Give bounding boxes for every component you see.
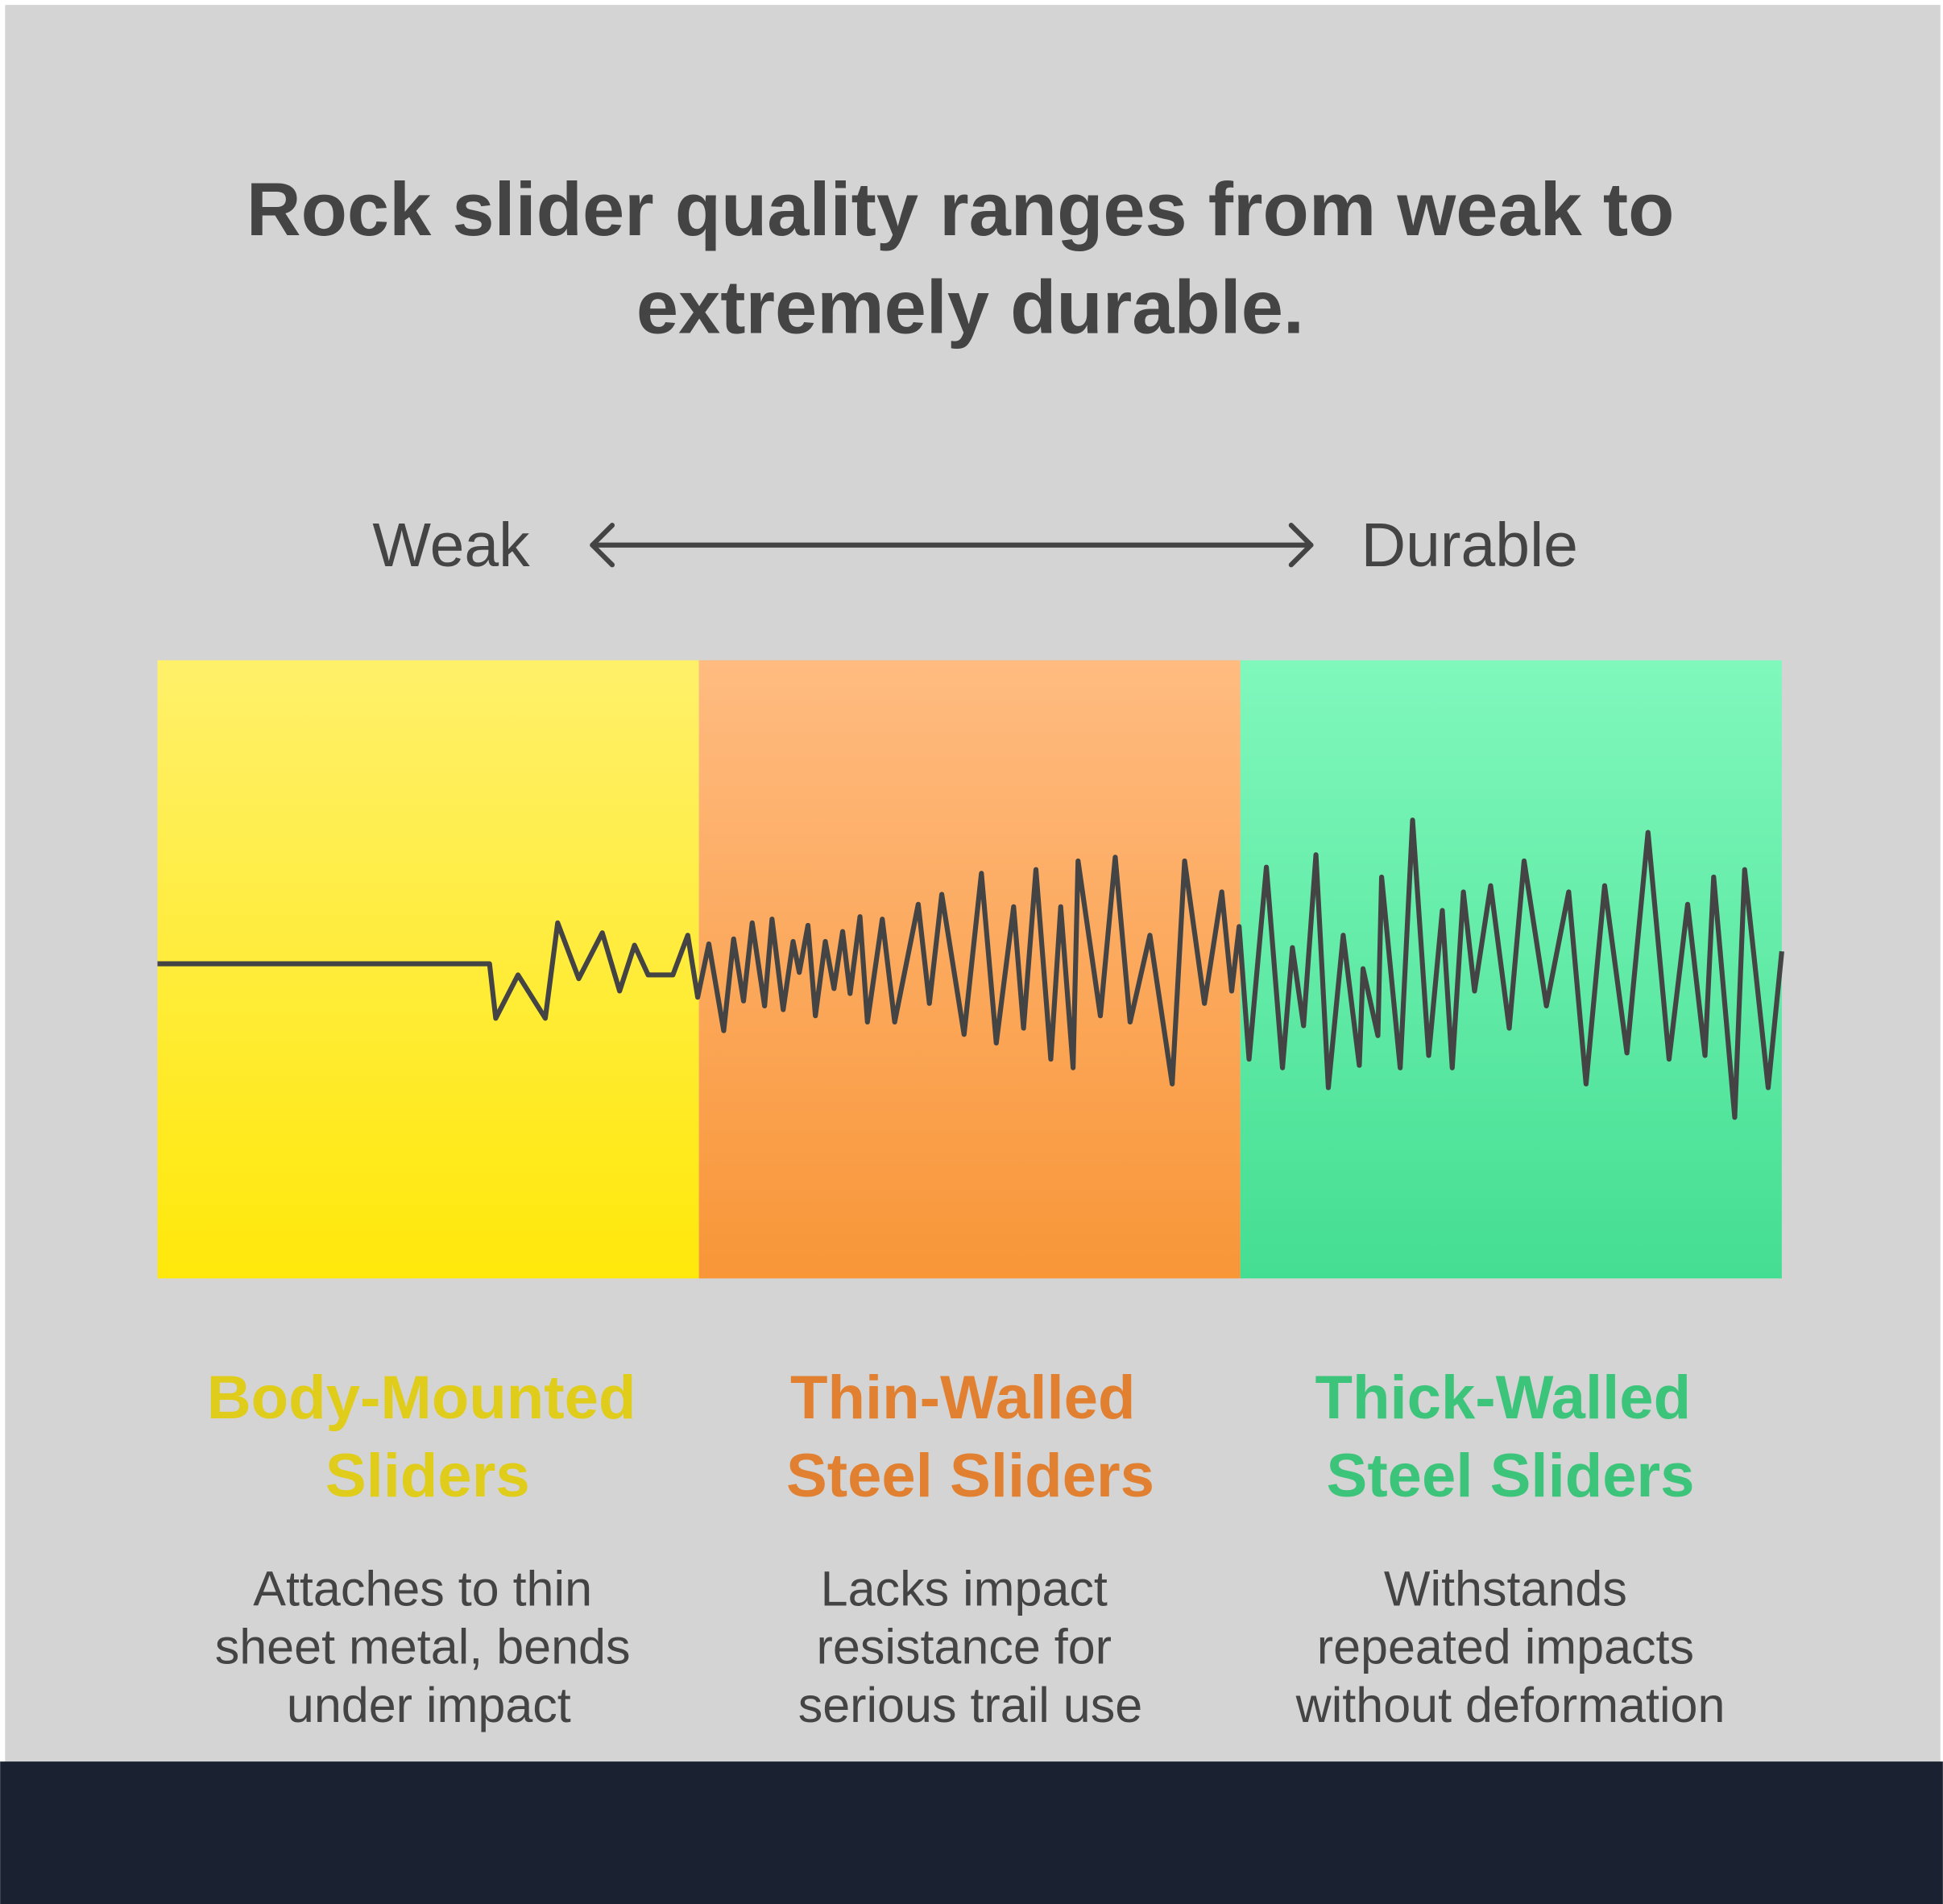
heading xyxy=(786,1364,1154,1510)
description: under impact xyxy=(287,1678,571,1732)
title: Rock slider quality ranges from weak to xyxy=(246,167,1674,251)
wave line xyxy=(157,820,1782,1117)
description: Lacks impact xyxy=(821,1561,1108,1616)
band: yellow xyxy=(157,660,699,1278)
description xyxy=(1295,1561,1725,1732)
description: repeated impacts xyxy=(1317,1620,1694,1674)
heading: Sliders xyxy=(325,1442,530,1510)
heading: Steel Sliders xyxy=(786,1442,1154,1510)
description: without deformation xyxy=(1295,1678,1725,1732)
footer bar xyxy=(0,1761,1943,1904)
description: serious trail use xyxy=(798,1678,1142,1732)
label: Durable: Durable xyxy=(1361,511,1578,580)
heading: Steel Sliders xyxy=(1327,1442,1695,1510)
heading: Body-Mounted xyxy=(207,1364,636,1432)
description: resistance for xyxy=(817,1620,1112,1674)
column: thick-walled steel sliders xyxy=(1295,1364,1725,1732)
chart: quality bands with wave xyxy=(157,660,1782,1278)
column: body-mounted sliders xyxy=(207,1364,636,1732)
heading xyxy=(1315,1364,1695,1510)
description xyxy=(798,1561,1142,1732)
label: Weak: Weak xyxy=(372,511,530,580)
description: Withstands xyxy=(1384,1561,1627,1616)
heading: Thin-Walled xyxy=(790,1364,1135,1432)
description xyxy=(215,1561,631,1732)
heading: Thick-Walled xyxy=(1315,1364,1691,1432)
title xyxy=(246,167,1674,350)
description: Attaches to thin xyxy=(253,1561,592,1616)
heading xyxy=(207,1364,636,1510)
description: sheet metal, bends xyxy=(215,1620,631,1674)
arrow: weak to durable xyxy=(592,525,1311,565)
title: extremely durable. xyxy=(636,265,1304,350)
band: orange xyxy=(699,660,1241,1278)
column: thin-walled steel sliders xyxy=(786,1364,1154,1732)
band: green xyxy=(1241,660,1782,1278)
